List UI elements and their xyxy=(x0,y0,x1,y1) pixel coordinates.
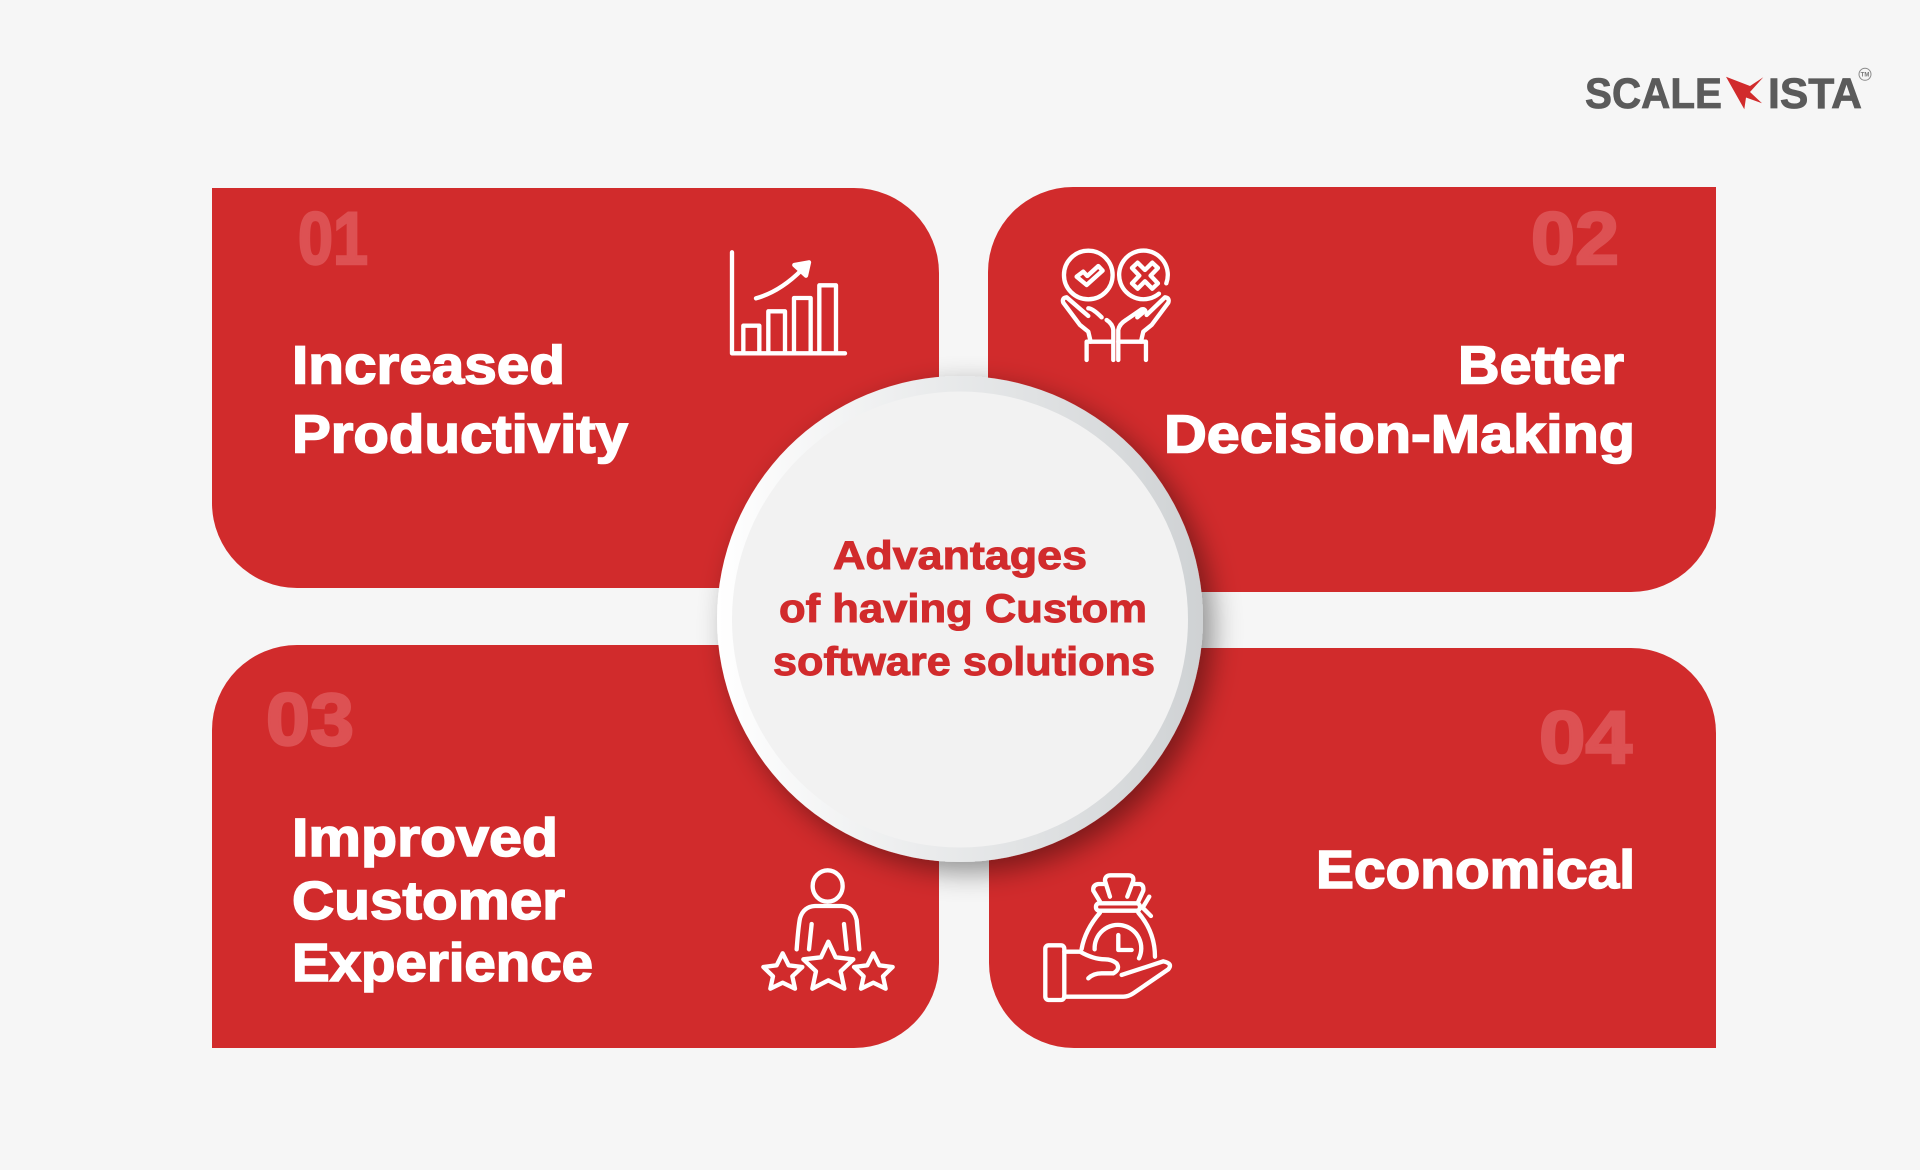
icon: bar chart with rising arrow xyxy=(732,252,845,353)
heading: Improved Customer Experience: Experience xyxy=(292,933,593,993)
heading: Better Decision-Making: Decision-Making xyxy=(1164,404,1635,464)
panel 04: Economical xyxy=(989,648,1716,1048)
icon: hand holding money bag with clock xyxy=(1045,875,1170,1000)
central title xyxy=(773,534,1155,684)
logo: ScaleVista xyxy=(1585,68,1871,118)
icon: person with three stars xyxy=(763,870,893,989)
central title: of having Custom xyxy=(779,587,1147,631)
heading: Improved Customer Experience: Customer xyxy=(292,871,565,931)
number 04: 04 xyxy=(1539,696,1632,779)
heading: Increased Productivity: Increased xyxy=(292,336,565,396)
central title: Advantages xyxy=(833,534,1087,578)
heading: Increased Productivity: Productivity xyxy=(292,404,628,464)
heading: Increased Productivity xyxy=(292,336,628,464)
logo: ScaleVista: SCALE xyxy=(1585,70,1722,118)
icon: hands holding check and cross xyxy=(1063,251,1169,360)
central title: software solutions xyxy=(773,640,1155,684)
heading: Economical: Economical xyxy=(1316,840,1635,900)
heading: Improved Customer Experience xyxy=(292,808,593,993)
panel 03: Improved Customer Experience xyxy=(212,645,939,1048)
central circle: Advantages of having Custom software solutions xyxy=(717,376,1203,862)
number 03: 03 xyxy=(266,678,354,761)
number 02: 02 xyxy=(1531,197,1619,280)
panel 01: Increased Productivity xyxy=(212,188,939,588)
heading: Better Decision-Making: Better xyxy=(1458,336,1624,396)
heading: Better Decision-Making xyxy=(1164,336,1635,464)
number 01: 01 xyxy=(298,197,368,280)
heading: Improved Customer Experience: Improved xyxy=(292,808,558,868)
panel 02: Better Decision-Making xyxy=(988,187,1716,592)
logo: ScaleVista: ISTA xyxy=(1768,70,1862,118)
logo: ScaleVista: TM xyxy=(1861,72,1869,78)
